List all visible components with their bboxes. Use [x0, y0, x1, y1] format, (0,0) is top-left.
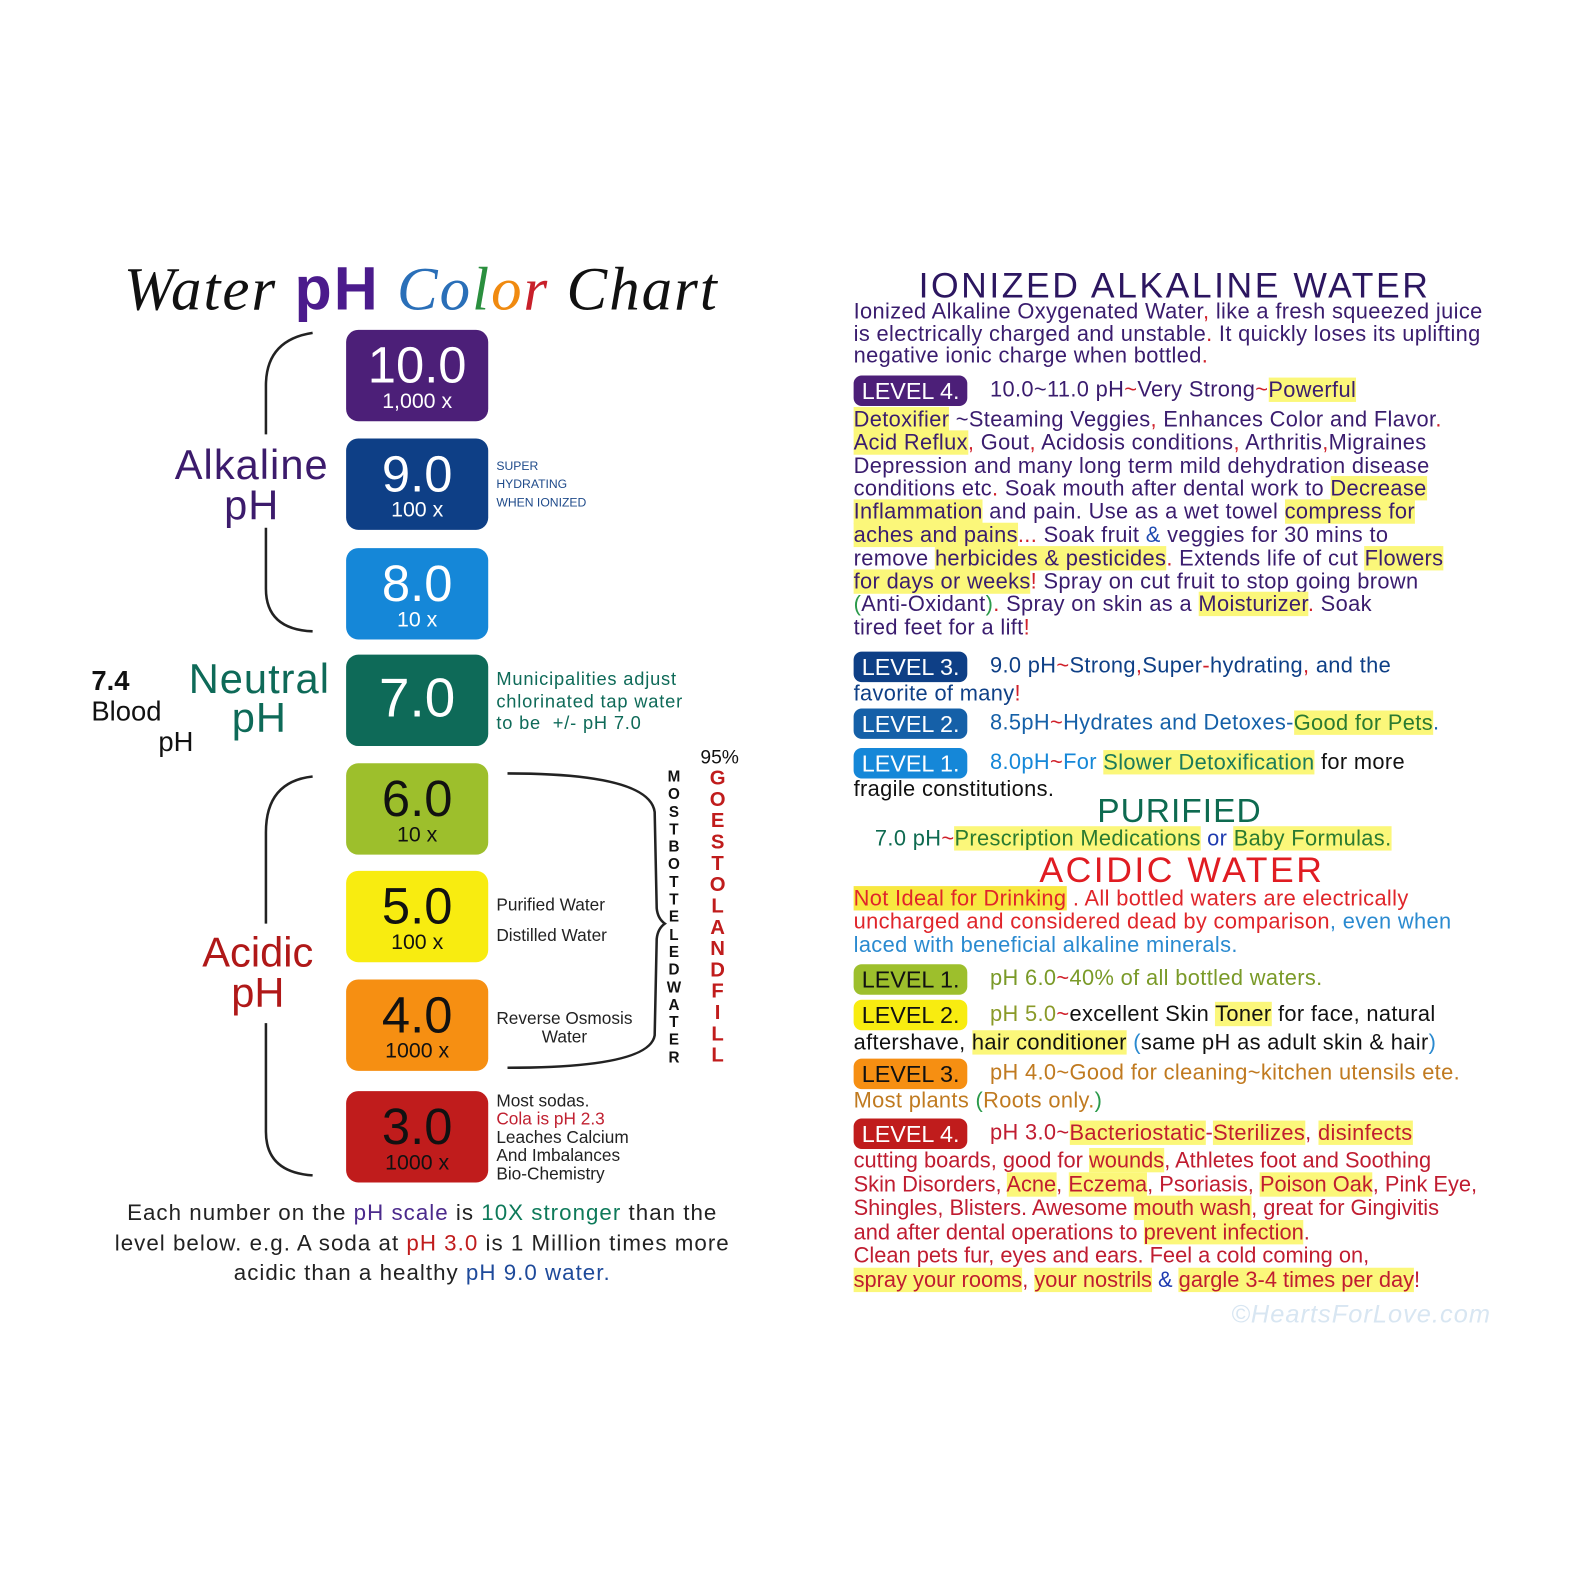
- blood ph: 7.4: [91, 666, 129, 696]
- text: 4.0: [382, 987, 452, 1043]
- text: pH 6.0~40% of all bottled waters.: [990, 966, 1323, 990]
- text: Most plants (Roots only.): [854, 1088, 1102, 1112]
- ph boxes: 1,000 x: [382, 390, 452, 413]
- text: 100 x: [391, 498, 443, 522]
- text: 8.0: [382, 555, 452, 612]
- text: conditions etc. Soak mouth after dental work to Decrease: [854, 476, 1427, 501]
- labels: Alkaline: [175, 442, 329, 488]
- text: Neutral: [189, 656, 330, 702]
- text: Clean pets fur, eyes and ears. Feel a cold coming on,: [854, 1244, 1369, 1268]
- text: Not Ideal for Drinking . All bottled waters are electrically: [854, 886, 1409, 910]
- blood ph: Blood: [91, 696, 161, 727]
- text: Purified Water: [496, 895, 605, 915]
- text: G O E S T O L A N D F I L L: [710, 767, 726, 1067]
- text: aches and pains... Soak fruit & veggies for 30 mins to: [854, 523, 1388, 547]
- text: LEVEL 4.: [862, 1121, 960, 1147]
- text: remove herbicides & pesticides. Extends life of cut Flowers: [854, 546, 1443, 570]
- text: Acidic: [202, 929, 313, 975]
- text: Distilled Water: [496, 926, 607, 945]
- side notes: [496, 459, 586, 510]
- watermark: ©HeartsForLove.com: [1231, 1300, 1491, 1329]
- footer text: level below. e.g. A soda at pH 3.0 is 1 Million times more: [115, 1230, 730, 1255]
- text: pH 5.0~excellent Skin Toner for face, natural: [990, 1001, 1436, 1026]
- footer text: acidic than a healthy pH 9.0 water.: [234, 1260, 611, 1285]
- text: LEVEL 1.: [862, 966, 960, 993]
- text: LEVEL 4.: [862, 378, 960, 404]
- text: pH 4.0~Good for cleaning~kitchen utensils ete.: [990, 1060, 1460, 1085]
- text: 8.0pH~For Slower Detoxification for more: [990, 750, 1405, 774]
- text: LEVEL 1.: [862, 750, 960, 776]
- text: Inflammation and pain. Use as a wet towel compress for: [854, 500, 1415, 524]
- text: 6.0: [382, 770, 452, 827]
- footer text: [115, 1200, 730, 1285]
- text: 9.0 pH~Strong,Super-hydrating, and the: [990, 653, 1391, 678]
- purified heading: PURIFIED: [1097, 792, 1262, 829]
- text: Leaches Calcium: [496, 1128, 629, 1147]
- title: Water pH Color Chart: [124, 255, 719, 323]
- text: And Imbalances: [496, 1146, 620, 1165]
- text: LEVEL 2.: [862, 710, 960, 737]
- text: 3.0: [382, 1098, 452, 1155]
- text: Shingles, Blisters. Awesome mouth wash, great for Gingivitis: [854, 1196, 1439, 1220]
- text: 7.0: [379, 668, 455, 729]
- text: 10.0~11.0 pH~Very Strong~Powerful: [990, 377, 1356, 402]
- text: for days or weeks! Spray on cut fruit to stop going brown: [854, 569, 1419, 593]
- text: uncharged and considered dead by comparison, even when: [854, 909, 1451, 934]
- text: (Anti-Oxidant). Spray on skin as a Moisturizer. Soak: [854, 592, 1372, 616]
- text: 10 x: [397, 823, 437, 847]
- text: LEVEL 2.: [862, 1002, 960, 1028]
- text: pH: [231, 969, 284, 1016]
- brackets: [264, 332, 667, 1177]
- ph boxes: 10.0: [368, 337, 467, 394]
- labels: pH: [224, 482, 279, 529]
- text: 100 x: [391, 931, 443, 954]
- right heading: IONIZED ALKALINE WATER: [919, 266, 1430, 306]
- side notes: WHEN IONIZED: [496, 495, 586, 510]
- text: cutting boards, good for wounds, Athletes foot and Soothing: [854, 1148, 1431, 1172]
- text: favorite of many!: [854, 681, 1021, 705]
- text: Detoxifier ~Steaming Veggies, Enhances Color and Flavor.: [854, 407, 1442, 431]
- text: laced with beneficial alkaline minerals.: [854, 933, 1238, 957]
- text: Reverse Osmosis: [496, 1009, 632, 1028]
- text: tired feet for a lift!: [854, 615, 1030, 640]
- text: 95%: [700, 747, 739, 768]
- footer text: Each number on the pH scale is 10X stronger than the: [127, 1200, 717, 1225]
- text: 5.0: [382, 878, 452, 935]
- ph boxes: [346, 330, 488, 421]
- labels: [174, 442, 329, 529]
- text: 10 x: [397, 608, 437, 631]
- text: pH 3.0~Bacteriostatic-Sterilizes, disinfects: [990, 1120, 1413, 1145]
- text: Municipalities adjust: [496, 669, 677, 689]
- text: LEVEL 3.: [862, 654, 960, 680]
- side notes: HYDRATING: [496, 477, 567, 491]
- blood ph: [91, 666, 193, 757]
- text: Skin Disorders, Acne, Eczema, Psoriasis, Poison Oak, Pink Eye,: [854, 1172, 1477, 1196]
- side notes: SUPER: [496, 459, 538, 473]
- text: Water: [542, 1027, 587, 1046]
- text: 9.0: [382, 446, 452, 502]
- right text: [854, 299, 1483, 367]
- text: Depression and many long term mild dehydration disease: [854, 453, 1430, 478]
- text: aftershave, hair conditioner (same pH as adult skin & hair): [854, 1030, 1436, 1055]
- text: 1000 x: [385, 1039, 449, 1063]
- acidic heading: ACIDIC WATER: [1039, 851, 1324, 890]
- text: Most sodas.: [496, 1091, 589, 1110]
- text: 8.5pH~Hydrates and Detoxes-Good for Pets.: [990, 710, 1439, 735]
- text: LEVEL 3.: [862, 1061, 960, 1087]
- text: chlorinated tap water: [496, 691, 683, 711]
- text: 7.0 pH~Prescription Medications or Baby Formulas.: [875, 826, 1391, 851]
- text: Bio-Chemistry: [496, 1164, 605, 1183]
- text: spray your rooms, your nostrils & gargle 3-4 times per day!: [854, 1268, 1420, 1292]
- text: 1000 x: [385, 1151, 449, 1174]
- right text: is electrically charged and unstable. It quickly loses its uplifting: [854, 321, 1481, 346]
- right text: Ionized Alkaline Oxygenated Water, like a fresh squeezed juice: [854, 299, 1483, 324]
- text: fragile constitutions.: [854, 776, 1054, 801]
- text: to be +/- pH 7.0: [496, 713, 642, 733]
- blood ph: pH: [158, 727, 193, 757]
- text: pH: [232, 694, 287, 741]
- text: Cola is pH 2.3: [496, 1109, 605, 1129]
- text: and after dental operations to prevent infection.: [854, 1220, 1310, 1244]
- text: Acid Reflux, Gout, Acidosis conditions, Arthritis,Migraines: [854, 430, 1426, 455]
- vertical text: M O S T B O T T E L E D W A T E R: [667, 768, 681, 1067]
- right text: negative ionic charge when bottled.: [854, 343, 1208, 367]
